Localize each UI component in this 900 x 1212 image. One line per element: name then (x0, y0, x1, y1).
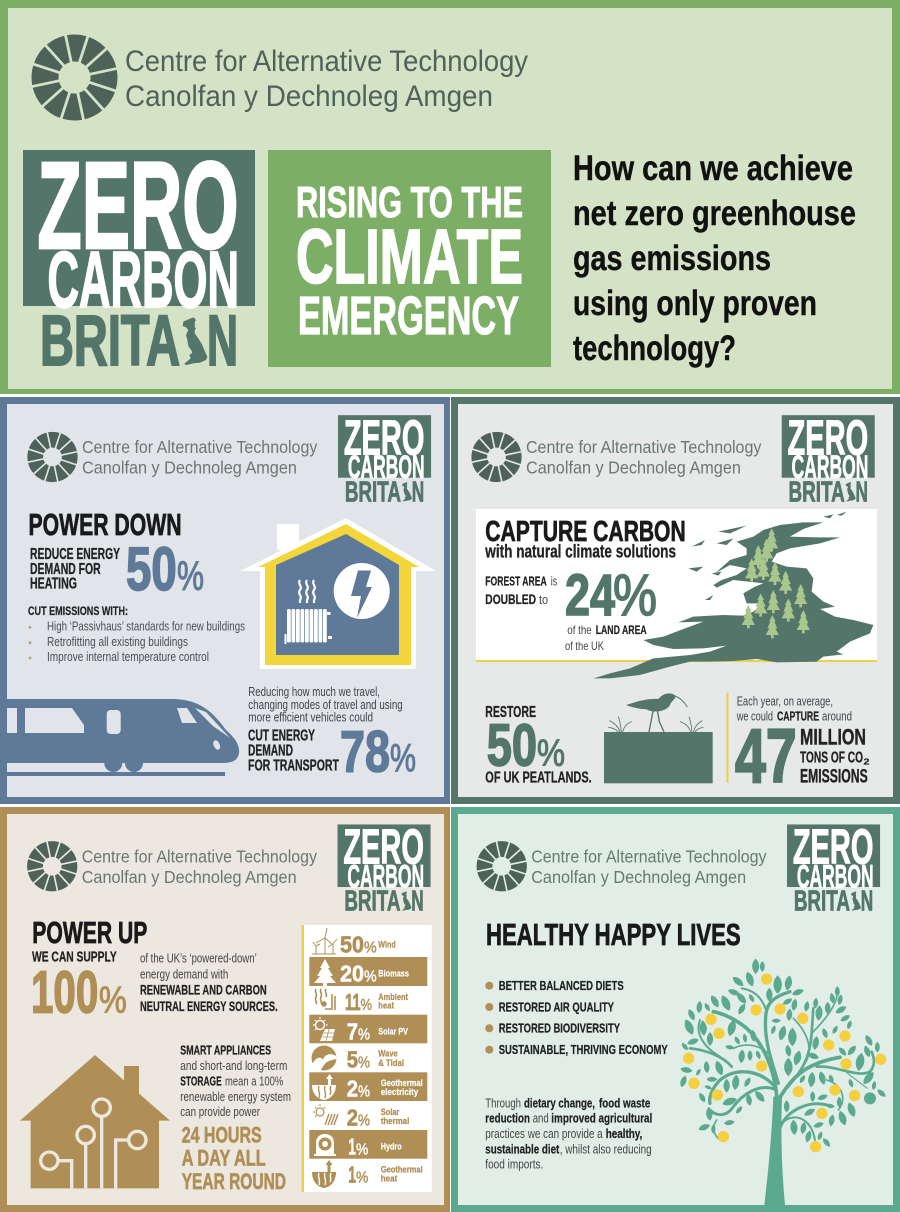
logo: Zero Carbon Britain: I (405, 887, 407, 915)
row: solar pv: Solar PV (378, 1026, 408, 1037)
row: solar pv: % (358, 1026, 370, 1043)
list: cut emissions: High ‘Passivhaus’ standards for new buildings (47, 620, 245, 634)
logo: Zero Carbon Britain: ZERO (343, 820, 424, 875)
stat: forest area 24%: DOUBLED (485, 591, 536, 607)
logo: Centre for Alternative Technology: Canolfan y Dechnoleg Amgen (125, 80, 493, 113)
logo: Zero Carbon Britain: N (412, 476, 424, 508)
stat: reduce heating demand 50%: REDUCE ENERGY (30, 546, 120, 563)
question heading: technology? (573, 329, 736, 368)
row: wind: 50 (340, 932, 364, 958)
logo: Zero Carbon Britain: BRITA (344, 886, 400, 918)
row: solar thermal: 2 (347, 1105, 358, 1131)
text: smart appliances: renewable energy system (180, 1090, 291, 1104)
row: ambient heat (315, 989, 409, 1015)
logo: Centre for Alternative Technology (471, 432, 762, 482)
stat: forest area 24%: % (613, 563, 657, 628)
stat: restore peatlands 50%: 50 (487, 713, 537, 779)
list: benefits: RESTORED AIR QUALITY (499, 999, 614, 1014)
logo: Centre for Alternative Technology: Canolfan y Dechnoleg Amgen (531, 867, 746, 887)
map: UK with forest trees (593, 512, 873, 678)
row: hydro: % (356, 1141, 368, 1158)
stat: cut transport demand 78%: DEMAND (248, 743, 293, 760)
row: solar thermal: % (358, 1113, 370, 1130)
chart: energy mix list (302, 925, 432, 1192)
list: benefits: SUSTAINABLE, THRIVING ECONOMY (499, 1042, 668, 1057)
heading: capture carbon: with natural climate solutions (485, 542, 676, 562)
row: wind: Wind (378, 940, 396, 951)
text: dietary change paragraph: improved agricultural (551, 1112, 652, 1126)
logo: Centre for Alternative Technology: Centre for Alternative Technology (125, 45, 528, 78)
stat: forest area 24%: LAND AREA (596, 623, 647, 637)
stat: capture 47 million tons: 2 (864, 758, 870, 766)
text: dietary change paragraph: , whilst also reducing (560, 1142, 652, 1156)
row: biomass: Biomass (378, 969, 409, 980)
text: dietary change paragraph (485, 1096, 652, 1172)
icon: fruit tree (679, 959, 887, 1205)
logo: Zero Carbon Britain: BRITA (345, 476, 401, 508)
row: wave and tidal: 5 (347, 1047, 358, 1073)
stat: capture 47 million tons: we could (736, 710, 773, 724)
stat: supply 100%: RENEWABLE AND CARBON (140, 982, 267, 997)
icon: house with circuit (20, 1055, 170, 1188)
logo: Zero Carbon Britain: N (411, 886, 424, 918)
row: geothermal electricity: electricity (381, 1087, 419, 1098)
row: geothermal heat: % (356, 1170, 368, 1187)
row: hydro (314, 1133, 402, 1159)
logo: Zero Carbon Britain: ZERO (38, 137, 238, 275)
logo: Zero Carbon Britain (338, 410, 431, 508)
logo: Zero Carbon Britain: N (856, 476, 868, 508)
row: wave and tidal: & Tidal (378, 1058, 404, 1069)
row: hydro: Hydro (381, 1141, 402, 1152)
logo: Zero Carbon Britain: N (207, 302, 238, 381)
logo: Zero Carbon Britain: I (855, 887, 856, 915)
stat: supply 100%: % (99, 979, 127, 1020)
row: geothermal heat: heat (381, 1174, 398, 1185)
text: dietary change paragraph: sustainable diet (485, 1142, 560, 1156)
text: dietary change paragraph: and (533, 1112, 549, 1126)
stat: restore peatlands 50%: OF UK PEATLANDS. (485, 770, 592, 787)
row: geothermal heat (312, 1160, 423, 1188)
logo: Zero Carbon Britain: ZERO (344, 410, 424, 465)
stat: reduce heating demand 50% (30, 535, 204, 603)
stat: restore peatlands 50%: % (537, 733, 565, 775)
stat: capture 47 million tons: Each year, on average, (737, 695, 833, 709)
list: cut emissions: CUT EMISSIONS WITH: (28, 604, 128, 618)
row: geothermal electricity: % (358, 1084, 370, 1101)
row: solar thermal: Solar (381, 1107, 400, 1118)
panel: capture carbon (451, 397, 900, 804)
row: ambient heat: % (360, 997, 372, 1014)
logo: Zero Carbon Britain (338, 820, 431, 918)
logo: Zero Carbon Britain: CARBON (348, 449, 425, 485)
logo: Centre for Alternative Technology (476, 841, 767, 892)
heading: power up: POWER UP (32, 915, 147, 950)
logo: Zero Carbon Britain: CARBON (48, 235, 239, 324)
stat: cut transport demand 78%: 78 (340, 720, 390, 785)
logo: Centre for Alternative Technology: Centre for Alternative Technology (82, 437, 318, 457)
icon: house with radiator and lightning (240, 518, 436, 669)
stat: forest area 24%: to (539, 593, 548, 607)
stat: forest area 24%: is (551, 575, 557, 589)
text: dietary change paragraph: practices we can provide a (485, 1127, 603, 1141)
stat: forest area 24%: of the (567, 623, 592, 637)
stat: supply 100%: energy demand with (140, 967, 228, 981)
banner: rising to the climate emergency: CLIMATE (296, 214, 523, 300)
stat: cut transport demand 78%: % (390, 738, 416, 781)
logo: Zero Carbon Britain: BRITA (794, 886, 850, 918)
stat: cut transport demand 78% (248, 720, 416, 785)
text: smart appliances (180, 1043, 291, 1119)
row: solar thermal: thermal (381, 1116, 409, 1127)
question heading: gas emissions (573, 239, 771, 278)
stat: reduce heating demand 50%: 50 (126, 535, 177, 603)
stat: forest area 24% (485, 563, 657, 653)
text: dietary change paragraph: Through (485, 1096, 521, 1110)
text: smart appliances: SMART APPLIANCES (180, 1043, 271, 1057)
text: dietary change paragraph: reduction (485, 1112, 530, 1126)
icon: curlew on peat block (604, 693, 713, 783)
logo: Zero Carbon Britain (782, 410, 875, 508)
row: geothermal electricity: Geothermal (381, 1078, 423, 1089)
logo: Centre for Alternative Technology (31, 34, 528, 121)
stat: capture 47 million tons: around (822, 710, 852, 724)
stat: supply 100%: of the UK’s ‘powered-down’ (140, 952, 257, 966)
stat: forest area 24%: of the UK (565, 639, 604, 653)
text: smart appliances: mean a 100% (225, 1074, 283, 1088)
heading: healthy happy lives: HEALTHY HAPPY LIVES (486, 917, 741, 952)
text: dietary change paragraph: food waste (599, 1096, 650, 1110)
stat: restore peatlands 50%: RESTORE (485, 704, 536, 721)
row: wind: % (364, 940, 377, 957)
row: solar thermal (313, 1104, 409, 1131)
row: ambient heat: heat (378, 1001, 395, 1012)
list: cut emissions: Retrofitting all existing buildings (47, 635, 188, 649)
stat: cut transport demand 78%: FOR TRANSPORT (248, 758, 339, 775)
callout: 24 hours a day all year round: 24 HOURS (182, 1122, 262, 1147)
logo: Zero Carbon Britain: I (192, 307, 196, 376)
text: transport reduction: changing modes of travel and using (248, 698, 403, 712)
stat: reduce heating demand 50%: % (177, 553, 204, 599)
logo: Zero Carbon Britain (23, 137, 255, 381)
white card with yellow rule (476, 509, 877, 662)
logo: Zero Carbon Britain: I (406, 478, 407, 506)
panel: healthy happy lives (451, 807, 900, 1212)
logo: Centre for Alternative Technology (27, 841, 317, 892)
list: benefits: RESTORED BIODIVERSITY (499, 1021, 620, 1036)
logo: Centre for Alternative Technology (27, 432, 318, 482)
row: hydro: 1 (348, 1133, 356, 1159)
stat: cut transport demand 78%: CUT ENERGY (248, 728, 315, 745)
stat: supply 100%: WE CAN SUPPLY (32, 950, 117, 966)
logo: Zero Carbon Britain (787, 820, 880, 918)
question heading: using only proven (573, 284, 817, 323)
logo: Centre for Alternative Technology: Canolfan y Dechnoleg Amgen (82, 458, 297, 478)
logo: Centre for Alternative Technology: Centre for Alternative Technology (82, 846, 317, 866)
row: biomass: % (364, 969, 377, 986)
logo: Zero Carbon Britain: BRITA (789, 476, 845, 508)
heading: capture carbon: CAPTURE CARBON (485, 516, 686, 548)
text: transport reduction (248, 685, 403, 725)
stat: supply 100% (31, 950, 278, 1025)
row: geothermal electricity (312, 1074, 423, 1102)
logo: Centre for Alternative Technology: Canolfan y Dechnoleg Amgen (82, 867, 297, 887)
text: smart appliances: and short-and long-term (180, 1059, 287, 1073)
logo: Centre for Alternative Technology: Canolfan y Dechnoleg Amgen (526, 458, 741, 478)
row: solar pv: 7 (347, 1018, 358, 1044)
callout: 24 hours a day all year round (182, 1122, 286, 1194)
text: transport reduction: Reducing how much we travel, (248, 685, 380, 699)
text: dietary change paragraph: dietary change, (524, 1096, 595, 1110)
callout: 24 hours a day all year round: A DAY ALL (182, 1146, 266, 1171)
row: ambient heat: Ambient (378, 992, 409, 1003)
row: wind (312, 928, 396, 958)
row: wave and tidal: Wave (378, 1049, 398, 1060)
stat: capture 47 million tons: CAPTURE (777, 710, 819, 724)
heading: capture carbon (485, 516, 686, 562)
logo: Zero Carbon Britain: CARBON (347, 858, 424, 894)
row: biomass (314, 959, 409, 987)
list: cut emissions: Improve internal temperature control (47, 650, 209, 664)
list: benefits: BETTER BALANCED DIETS (499, 978, 624, 993)
divider: yellow rule (726, 693, 728, 783)
panel: power up (0, 807, 450, 1212)
stat: supply 100%: NEUTRAL ENERGY SOURCES. (140, 999, 278, 1014)
text: dietary change paragraph: healthy, (606, 1127, 642, 1141)
heading: power down: POWER DOWN (28, 507, 182, 542)
logo: Zero Carbon Britain: N (861, 886, 873, 918)
panel: power down (0, 397, 450, 804)
question heading (573, 149, 856, 368)
stat: capture 47 million tons: MILLION (800, 724, 866, 749)
row: geothermal heat: Geothermal (381, 1165, 423, 1176)
text: smart appliances: STORAGE (180, 1074, 222, 1088)
banner: rising to the climate emergency: RISING TO THE (296, 178, 523, 227)
row: geothermal heat: 1 (348, 1162, 356, 1188)
stat: capture 47 million tons: 47 (735, 714, 797, 799)
row: wave and tidal: % (358, 1055, 370, 1072)
callout: 24 hours a day all year round: YEAR ROUND (182, 1169, 286, 1194)
icon: train (7, 699, 239, 776)
stat: reduce heating demand 50%: HEATING (30, 576, 77, 593)
logo: Centre for Alternative Technology: Centre for Alternative Technology (526, 437, 762, 457)
banner: rising to the climate emergency: EMERGENCY (298, 286, 519, 346)
row: geothermal electricity: 2 (347, 1076, 358, 1102)
stat: supply 100%: 100 (31, 959, 98, 1025)
list: benefits (485, 978, 668, 1057)
stat: restore peatlands 50% (485, 704, 592, 787)
logo: Zero Carbon Britain: I (849, 478, 851, 506)
text: dietary change paragraph: food imports. (485, 1158, 543, 1172)
row: ambient heat: 11 (345, 989, 361, 1015)
panel: header (0, 0, 900, 394)
text: smart appliances: can provide power (180, 1105, 260, 1119)
stat: capture 47 million tons: TONS OF CO (800, 750, 863, 767)
stat: capture 47 million tons (735, 695, 870, 799)
logo: Centre for Alternative Technology: Centre for Alternative Technology (531, 846, 767, 866)
stat: forest area 24%: 24 (565, 563, 615, 628)
stat: forest area 24%: FOREST AREA (485, 575, 547, 589)
row: solar pv (313, 1017, 408, 1044)
stat: reduce heating demand 50%: DEMAND FOR (30, 561, 101, 578)
row: biomass: 20 (340, 961, 364, 987)
text: transport reduction: more efficient vehicles could (248, 711, 373, 725)
list: cut emissions (28, 604, 245, 664)
banner: rising to the climate emergency (268, 150, 551, 367)
logo: Zero Carbon Britain: BRITA (40, 302, 180, 381)
row: wave and tidal (312, 1046, 404, 1073)
